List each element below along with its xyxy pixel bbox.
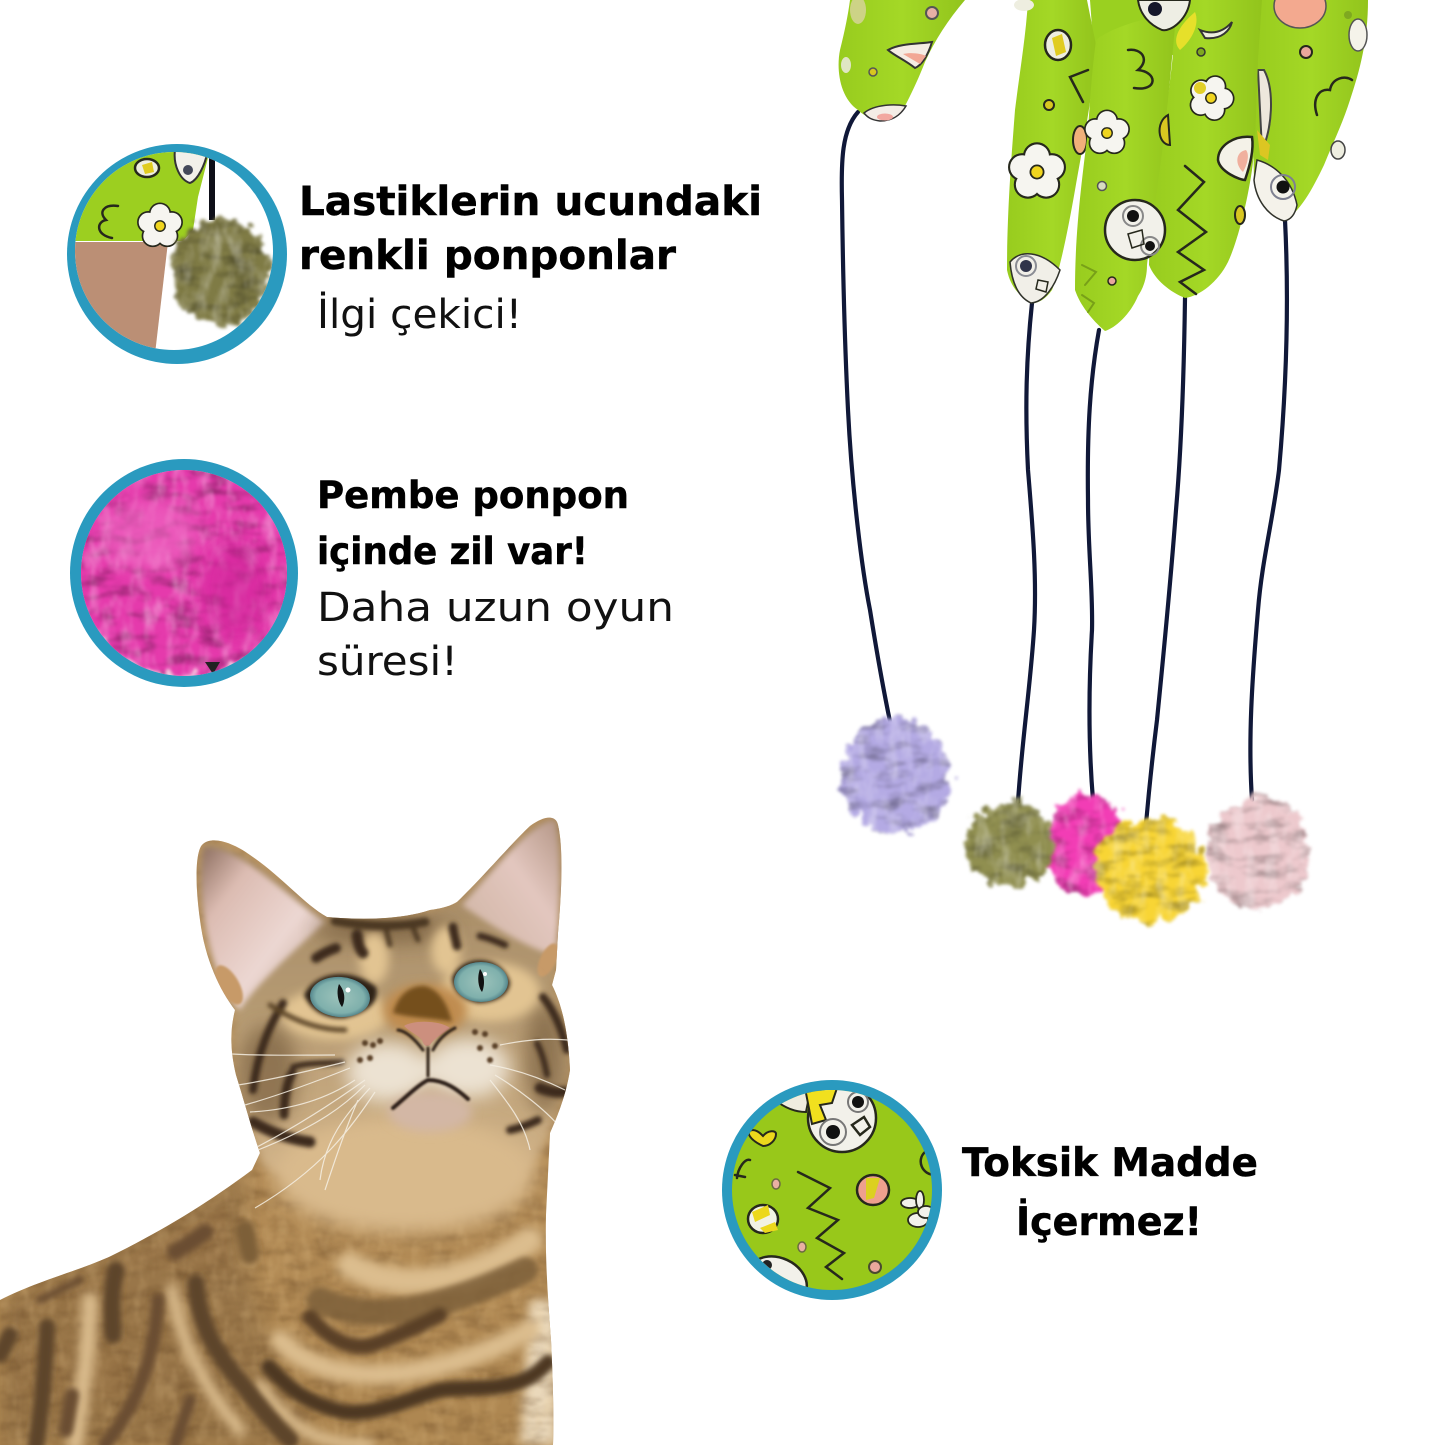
mouth [393, 1080, 468, 1108]
flower on finger [1010, 144, 1064, 197]
text: pompoms [299, 179, 762, 338]
text: non-toxic: İçermez! [1016, 1198, 1202, 1245]
nose bridge glow [383, 984, 467, 1036]
pompom: rose [1206, 797, 1310, 909]
pale fur bands [75, 1240, 530, 1445]
cat photo illustration [0, 810, 580, 1445]
callout icon: green fabric detail [722, 1080, 942, 1313]
product: hanging toy with five fingers [839, 0, 1368, 923]
text: non-toxic: Toksik Madde [962, 1141, 1258, 1186]
nose [404, 1022, 450, 1046]
nose outline and philtrum [398, 1028, 455, 1076]
fur texture [0, 810, 580, 1445]
left eye [304, 974, 377, 1019]
pompom: pink [1044, 795, 1128, 895]
top fabric with face and crown [1138, 0, 1232, 50]
text: non-toxic [962, 1141, 1258, 1245]
text: bell inside pink pompom: Daha uzun oyun [317, 585, 674, 631]
finger: third [1075, 15, 1176, 331]
body stripes [0, 1230, 548, 1445]
right inner ear [462, 820, 559, 955]
shaded left flank [0, 1170, 320, 1445]
finger: second [1007, 0, 1097, 303]
text: bell inside pink pompom: süresi! [317, 639, 458, 685]
finger: left [839, 0, 965, 121]
callout icon: olive pompom detail [67, 144, 287, 364]
finger: fifth [1254, 0, 1368, 221]
chin [388, 1092, 472, 1132]
head stripes [253, 921, 567, 1142]
nose bridge [393, 986, 452, 1022]
text: pompoms: renkli ponponlar [299, 233, 676, 279]
right eye [452, 960, 510, 1003]
callout icon: pink pompom detail [68, 451, 304, 690]
muzzle white [346, 1038, 510, 1102]
pompom: olive [965, 801, 1055, 887]
text: bell inside pink pompom: içinde zil var! [317, 530, 588, 573]
pompom: lilac [842, 717, 950, 833]
throat light [275, 1117, 535, 1233]
pompom: yellow [1096, 817, 1204, 923]
cat head base [200, 820, 570, 1203]
text: bell inside pink pompom: Pembe ponpon [317, 474, 629, 517]
dark cheeks and forehead [238, 916, 565, 1125]
left inner ear [202, 848, 325, 1010]
pale chest edge [520, 1300, 556, 1445]
text: pompoms: İlgi çekici! [317, 290, 522, 338]
text: bell inside pink pompom [317, 474, 674, 685]
finger: fourth [1149, 0, 1262, 298]
string strands [842, 112, 1287, 824]
muzzle spots [357, 1029, 498, 1063]
fur highlights [1, 937, 538, 1445]
whiskers [232, 1039, 568, 1208]
ear base tufts [209, 940, 563, 1009]
text: pompoms: Lastiklerin ucundaki [299, 179, 762, 225]
cat body [0, 810, 580, 1445]
cream eye surrounds [281, 926, 540, 1040]
fabric backing at top of hand [1090, 0, 1268, 55]
